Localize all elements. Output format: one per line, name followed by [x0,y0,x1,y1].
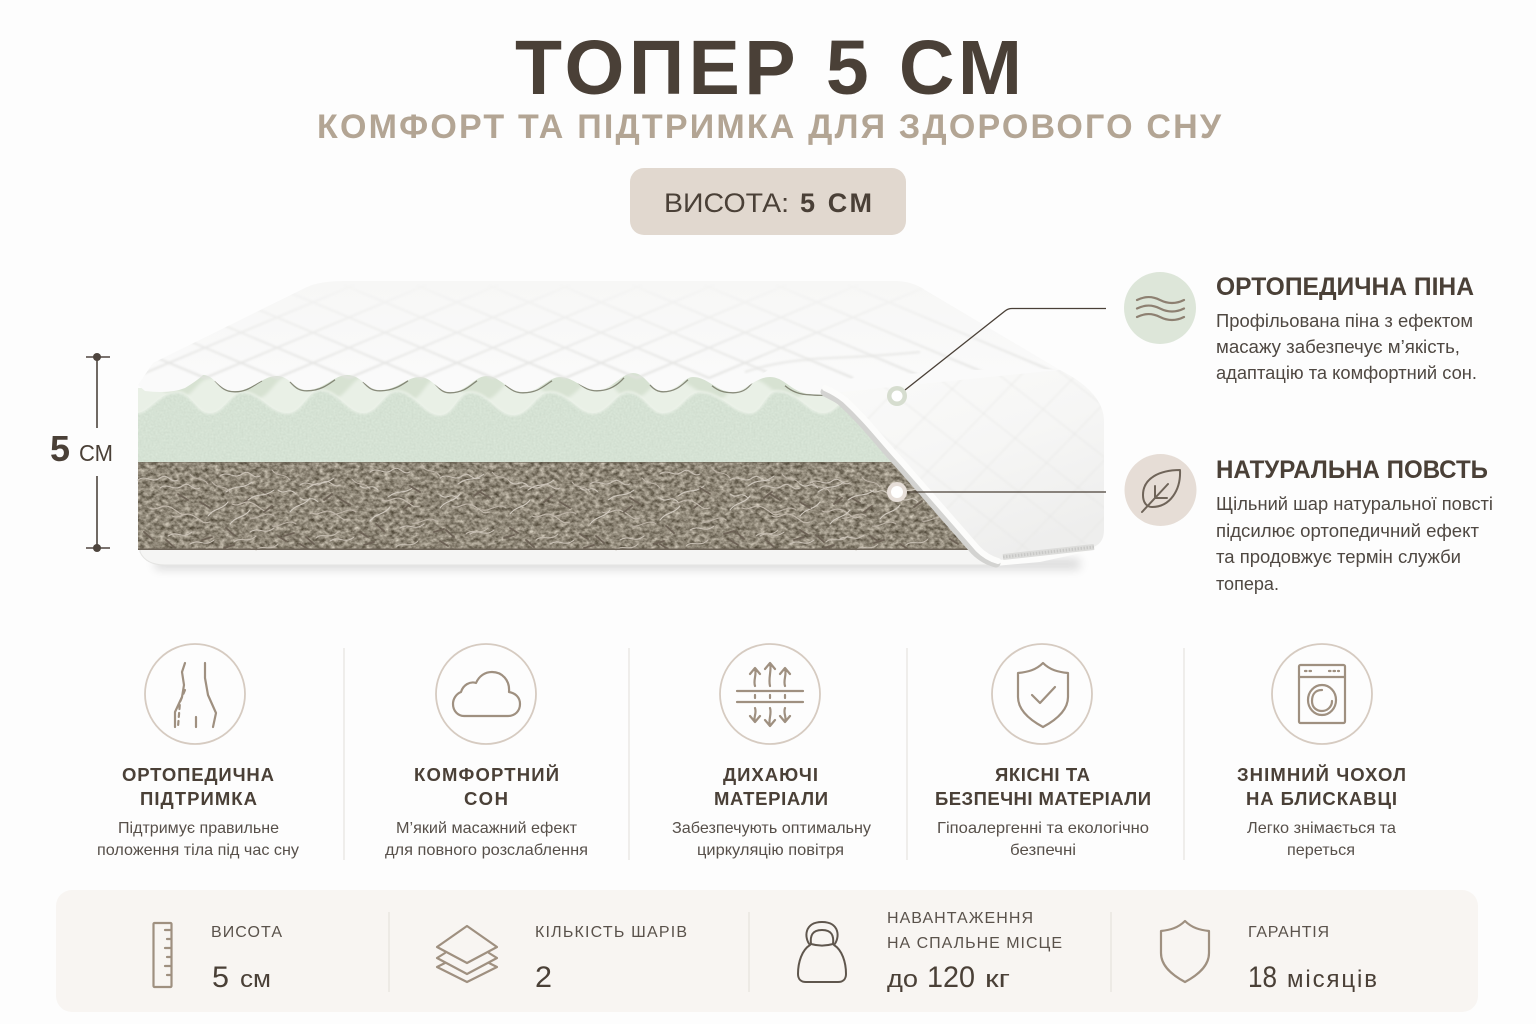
ground shadow [155,559,1080,569]
panel: natural felt [1124,454,1493,594]
quilting on top [146,316,1051,379]
icon: leaf [1124,454,1196,526]
icon: layers [437,926,497,982]
title: ТОПЕР 5 СМ [515,25,1022,111]
icon: body [145,644,245,744]
feature: removable cover [1237,644,1406,859]
spec: load: НА СПАЛЬНЕ МІСЦЕ [887,935,1062,952]
feature: breathable materials: МАТЕРІАЛИ [714,788,828,809]
icon: washing machine [1272,644,1372,744]
height dimension: СМ [79,440,113,466]
panel: natural felt: топера. [1216,573,1279,594]
spec: load: кг [985,966,1010,993]
spec: load: НАВАНТАЖЕННЯ [887,910,1033,927]
feature: removable cover: переться [1287,842,1355,859]
callout: natural felt [887,482,1106,502]
panel: natural felt: Щільний шар натуральної повсті [1216,493,1493,514]
side panel of the flap [884,376,1104,560]
icon: cloud [436,644,536,744]
feature: orthopedic support: ОРТОПЕДИЧНА [122,764,274,785]
felt layer [138,461,998,550]
feature: safe materials: БЕЗПЕЧНІ МАТЕРІАЛИ [935,788,1151,809]
height badge [630,168,906,235]
feature dividers [344,648,1184,860]
panel: orthopedic foam: Профільована піна з ефектом [1216,310,1473,331]
height dimension: 5 [50,428,70,469]
height dimension [50,353,113,552]
spec: layers [437,924,687,994]
spec: warranty: ГАРАНТІЯ [1248,924,1329,941]
spec: layers: КІЛЬКІСТЬ ШАРІВ [535,924,687,941]
spec: height: см [240,966,271,993]
fold shadow on flap [745,352,920,372]
panel: orthopedic foam [1124,272,1477,383]
spec: warranty: 18 [1248,961,1277,994]
flap binding [825,392,996,563]
feature: comfortable sleep [385,644,588,859]
feature: comfortable sleep: М’який масажний ефект [396,820,578,837]
spec: height: 5 [212,961,229,994]
feature: orthopedic support: Підтримує правильне [118,820,279,837]
feature: removable cover: ЗНІМНИЙ ЧОХОЛ [1237,764,1406,785]
spec: warranty: місяців [1287,966,1377,993]
feature: breathable materials: ДИХАЮЧІ [723,764,818,785]
feature: comfortable sleep: СОН [464,788,508,809]
feature: safe materials: безпечні [1010,842,1076,859]
icon: ruler [154,923,172,987]
feature: orthopedic support [97,644,299,859]
feature: removable cover: Легко знімається та [1247,820,1396,837]
feature: breathable materials: циркуляцію повітря [697,842,844,859]
icon: kettlebell [798,922,846,982]
spec: layers: 2 [535,961,552,994]
spec: height [154,923,282,994]
icon: waves [1124,272,1196,344]
spec: load [798,910,1062,994]
height badge: 5 СМ [800,188,872,218]
spec: height: ВИСОТА [211,924,282,941]
feature: orthopedic support: положення тіла під час сну [97,842,299,859]
icon: shield with check [992,644,1092,744]
feature: safe materials: ЯКІСНІ ТА [995,764,1090,785]
panel: orthopedic foam: масажу забезпечує м’якість, [1216,336,1460,357]
feature: orthopedic support: ПІДТРИМКА [140,788,257,809]
specs panel [56,890,1478,1012]
icon: shield [1161,921,1209,982]
panel: orthopedic foam: ОРТОПЕДИЧНА ПІНА [1216,273,1474,301]
mattress illustration [138,286,1104,572]
zipper [1003,547,1094,557]
feature: removable cover: НА БЛИСКАВЦІ [1246,788,1397,809]
feature: comfortable sleep: КОМФОРТНИЙ [414,764,559,785]
spec: load: 120 [927,961,975,994]
foam layer [138,373,891,462]
subtitle: КОМФОРТ ТА ПІДТРИМКА ДЛЯ ЗДОРОВОГО СНУ [317,108,1222,146]
spec: load: до [887,966,918,993]
feature: breathable materials [672,644,871,859]
panel: natural felt: підсилює ортопедичний ефект [1216,520,1480,541]
spec: warranty [1161,921,1377,994]
feature: safe materials [935,644,1151,859]
callout: orthopedic foam [887,308,1106,406]
top cover with scalloped front edge [142,286,1104,568]
feature: comfortable sleep: для повного розслаблення [385,842,588,859]
feature: safe materials: Гіпоалергенні та екологічно [937,820,1149,837]
panel: natural felt: НАТУРАЛЬНА ПОВСТЬ [1216,456,1488,484]
dark underside line [215,378,834,397]
feature: breathable materials: Забезпечують оптимальну [672,820,871,837]
panel: natural felt: та продовжує термін служби [1216,546,1461,567]
bottom cover strip [140,548,1000,565]
panel: orthopedic foam: адаптацію та комфортний сон. [1216,362,1477,383]
icon: airflow [720,644,820,744]
height badge: ВИСОТА: [664,188,789,218]
